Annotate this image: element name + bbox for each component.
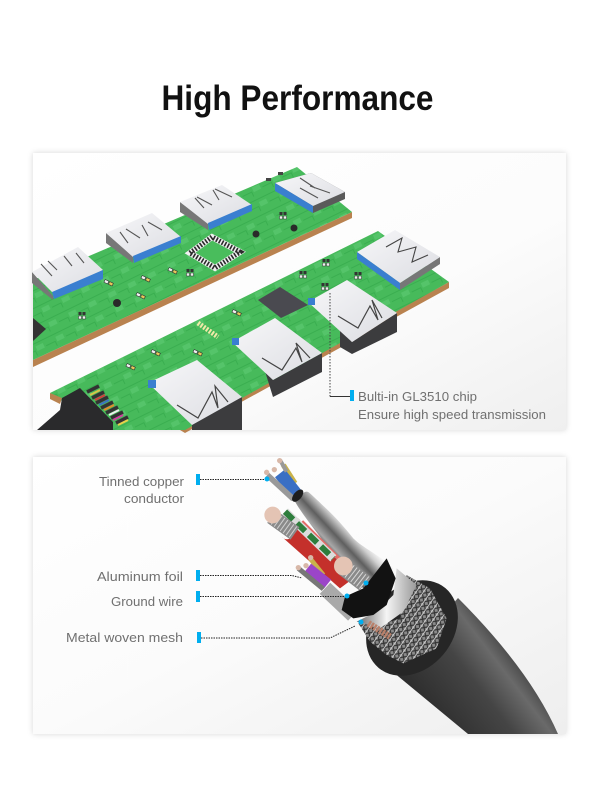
- black inner shield: [342, 558, 396, 618]
- small components, lower board: [126, 259, 362, 370]
- callout: GL3510 chip: [330, 293, 546, 422]
- lower circuit board: [50, 231, 449, 433]
- callout: tinned copper conductor: Tinned copper: [99, 474, 185, 489]
- callout: metal woven mesh: Metal woven mesh: [66, 630, 183, 645]
- panel: USB cable cross-section: [33, 457, 566, 734]
- upper circuit board: [33, 167, 352, 367]
- ribbon cable plug: [37, 386, 128, 430]
- blue wire: [264, 458, 305, 504]
- aluminum foil sleeve: [357, 568, 417, 628]
- callout: tinned copper conductor: conductor: [124, 491, 185, 506]
- controller chip GL3510: [258, 287, 308, 318]
- callout: ground wire: Ground wire: [111, 594, 183, 609]
- callout: GL3510 chip: Ensure high speed transmission: [358, 407, 546, 422]
- large strand bundle 1: [264, 507, 295, 533]
- USB port 4: [275, 173, 345, 213]
- exposed cable conductors: [264, 458, 447, 663]
- USB port 1: [32, 247, 103, 300]
- green twisted pair: [285, 512, 333, 558]
- red wire: [282, 518, 353, 588]
- title: High Performance: [162, 79, 434, 118]
- large strand bundle 2: [334, 557, 365, 583]
- ground wire sleeve: [325, 588, 353, 615]
- copper strands: [368, 623, 390, 637]
- metal woven mesh: [358, 575, 447, 663]
- USB port 5: [357, 230, 440, 290]
- callout: aluminum foil: Aluminum foil: [97, 569, 183, 584]
- cable outer jacket: [347, 562, 558, 734]
- callout: tinned copper conductor: [99, 474, 270, 506]
- silver foil wrap: [295, 492, 393, 602]
- panel: USB hub circuit boards: [32, 153, 566, 433]
- USB port 8: [148, 360, 242, 430]
- purple wire: [296, 555, 327, 589]
- USB port 2: [106, 213, 181, 263]
- USB port 6: [308, 280, 397, 354]
- callout: metal woven mesh: [66, 620, 364, 645]
- QFN chip footprint: [190, 237, 240, 268]
- small components, upper board: [78, 172, 298, 319]
- callout: ground wire: [111, 591, 350, 609]
- callout: GL3510 chip: Bulti-in GL3510 chip: [358, 389, 477, 404]
- USB port 7: [232, 318, 322, 397]
- USB port 3: [180, 185, 252, 230]
- callout: aluminum foil: [97, 569, 368, 586]
